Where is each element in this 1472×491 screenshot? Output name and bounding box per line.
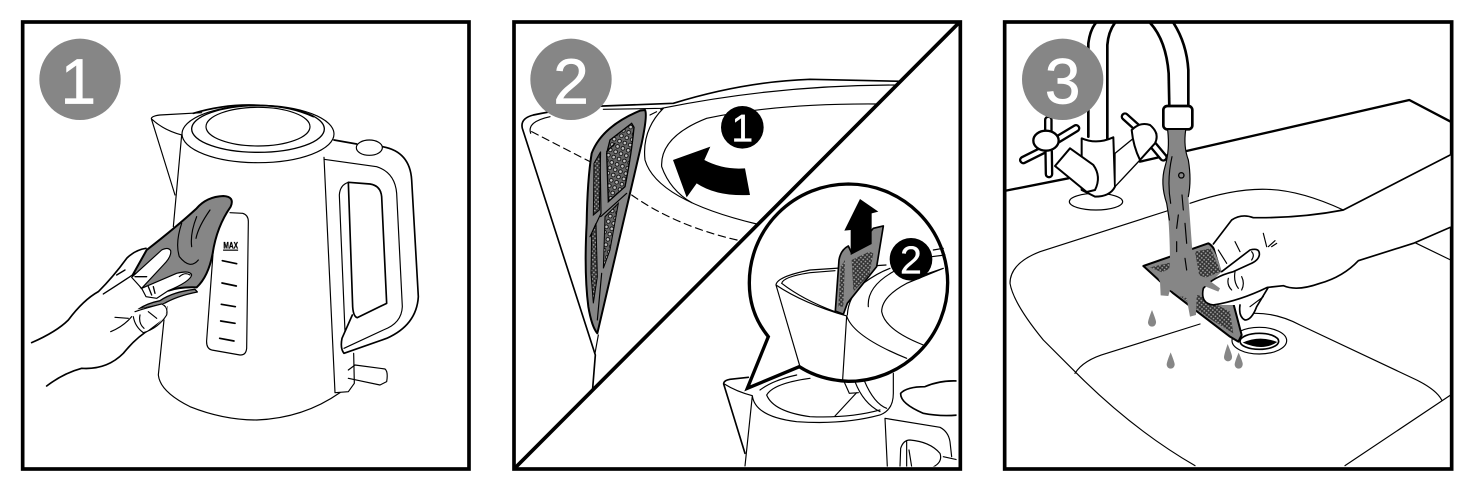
panel frame 2 — [514, 22, 960, 469]
base switch — [348, 365, 387, 385]
drain — [1232, 327, 1287, 354]
lower kettle — [724, 373, 958, 468]
panel: step 1 wipe kettle — [23, 22, 469, 469]
hand with cloth — [32, 196, 232, 386]
countertop edge — [1006, 100, 1451, 191]
step badge 2: 2 — [553, 45, 589, 117]
nozzle — [1163, 106, 1192, 129]
water gauge — [207, 213, 248, 355]
hand on lower kettle — [901, 381, 958, 416]
filter closeup — [586, 110, 646, 333]
gauge ticks — [220, 261, 237, 341]
filter in hand — [1143, 243, 1242, 342]
callout number 1 — [721, 106, 764, 151]
arm and hand — [1202, 153, 1453, 320]
step badge 1: 1 — [61, 45, 96, 117]
sink — [1010, 189, 1451, 466]
panel: step 3 rinse filter — [1005, 22, 1453, 469]
callout number 1: 1 — [731, 107, 753, 151]
lid button — [356, 140, 382, 155]
magnifier callout — [747, 184, 948, 388]
upper kettle closeup — [522, 79, 903, 388]
filter lifted — [835, 226, 883, 314]
water stream — [1157, 130, 1220, 317]
panel frame 3 — [1005, 22, 1452, 469]
up arrow — [844, 199, 878, 255]
MAX label: MAX — [223, 241, 238, 251]
cloth — [133, 196, 232, 291]
panel frame 1 — [23, 22, 469, 469]
kettle — [151, 105, 418, 420]
water drops — [1148, 310, 1243, 369]
panel: step 2 remove filter — [514, 22, 960, 469]
step badge 3 — [1022, 39, 1103, 120]
step badge 1 — [39, 39, 121, 120]
spout in callout — [776, 265, 886, 379]
callout number 2: 2 — [900, 239, 922, 283]
diagonal divider — [515, 23, 959, 468]
faucet — [1023, 23, 1192, 210]
callout number 2 — [890, 238, 932, 283]
rotation arrow — [673, 147, 750, 197]
step badge 3: 3 — [1045, 45, 1080, 117]
step badge 2 — [530, 39, 612, 120]
